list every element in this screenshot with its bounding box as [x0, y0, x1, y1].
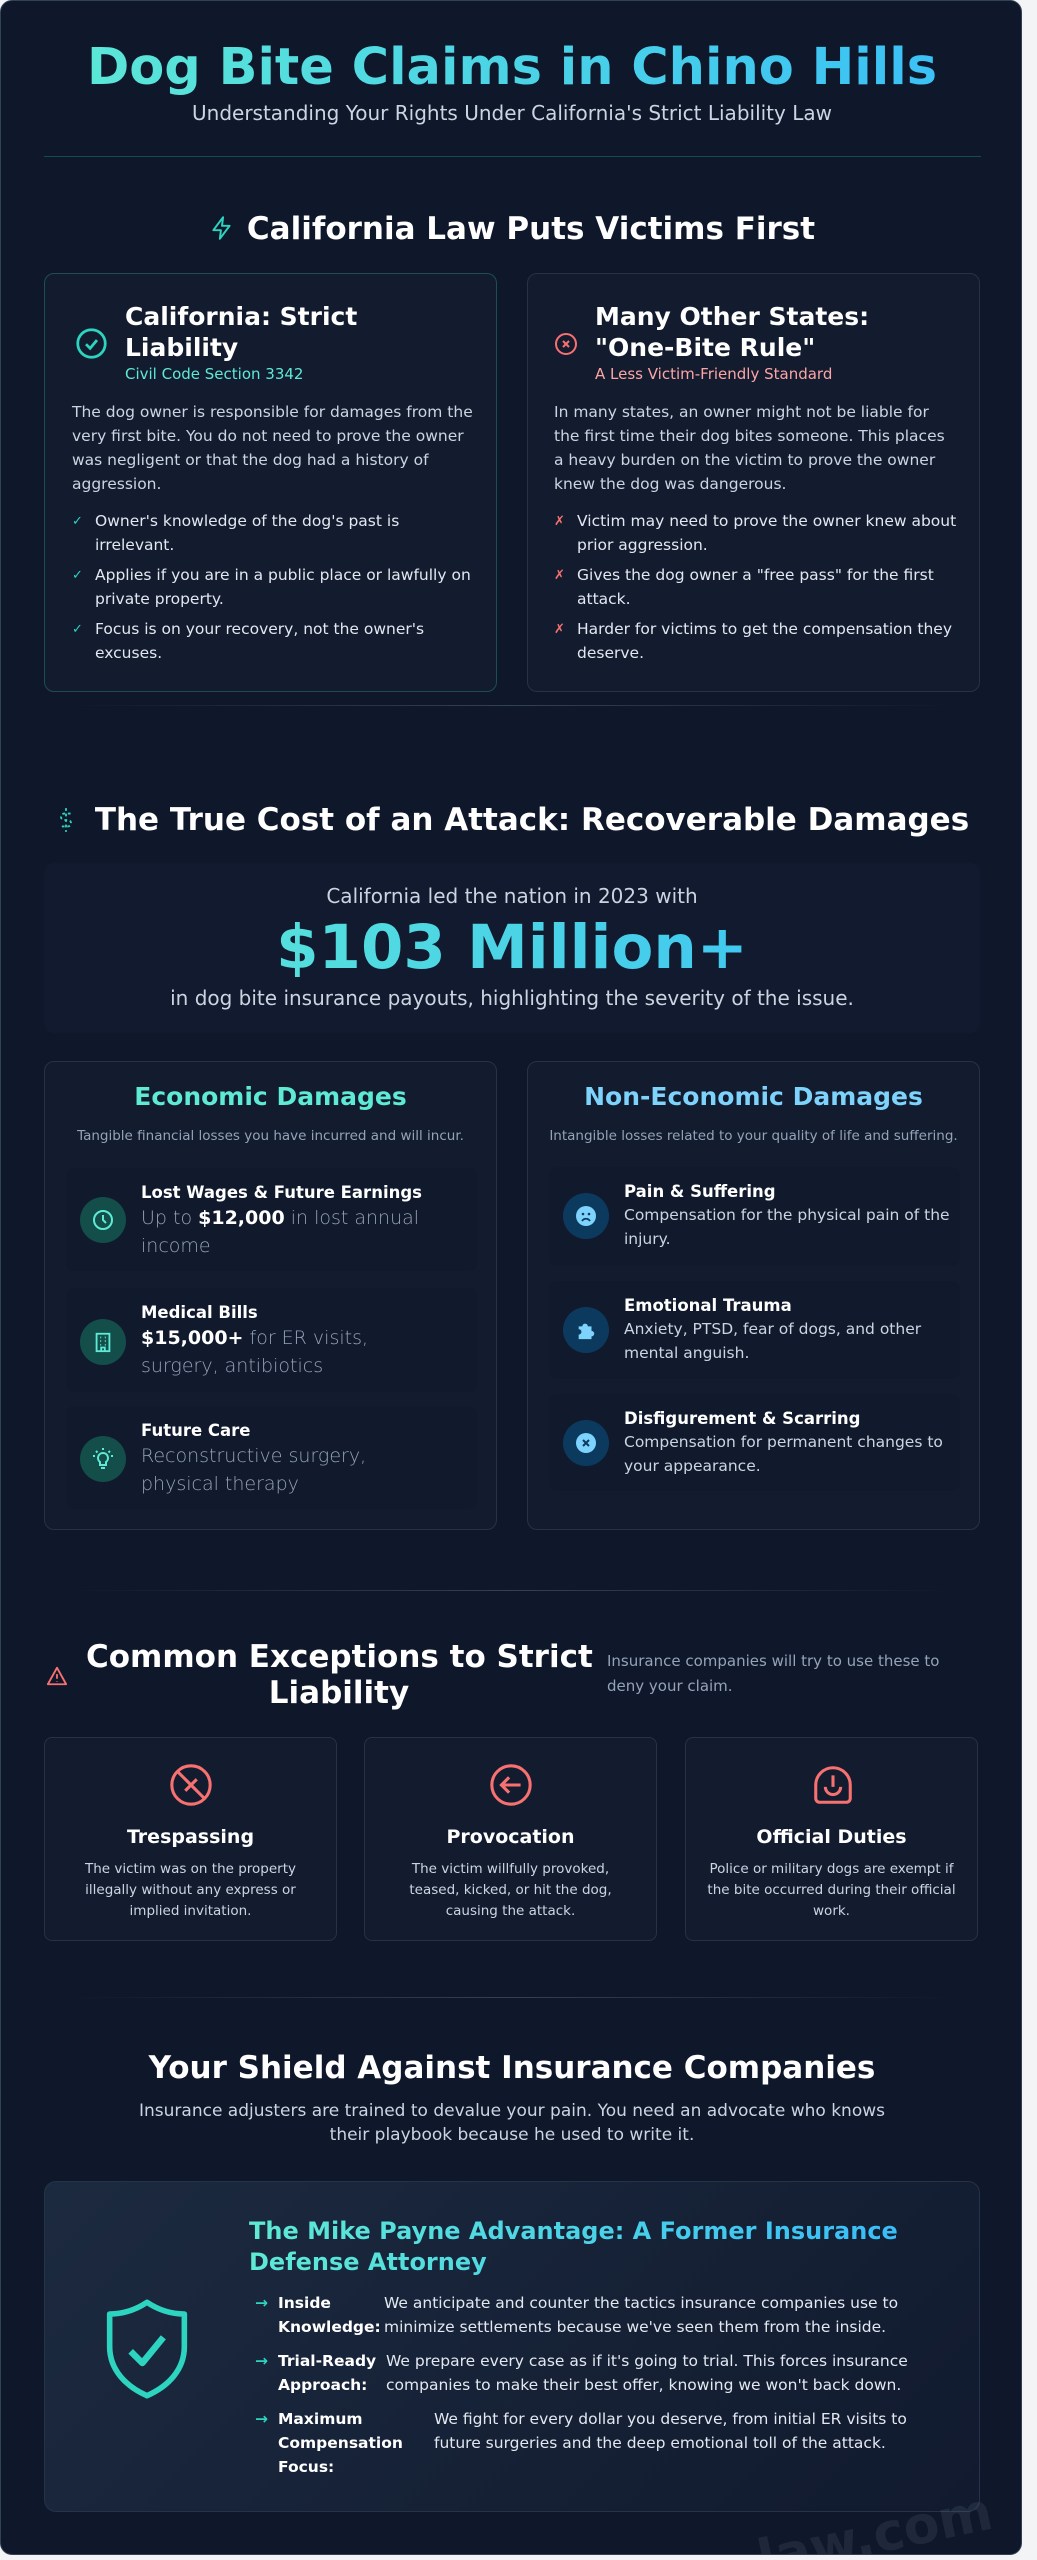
body text: a heavy burden on the victim to prove the owner	[554, 451, 935, 469]
x list: attack.	[577, 590, 631, 608]
panel subtitle: Tangible financial losses you have incurred and will incur.	[77, 1128, 464, 1144]
bullet: trial-ready: companies to make their best offer, knowing we won't back down.	[386, 2376, 901, 2394]
checklist: excuses.	[95, 644, 162, 662]
bullet: trial-ready: →	[255, 2352, 268, 2370]
bullet: inside knowledge: minimize settlements because we've seen them from the inside.	[384, 2318, 886, 2336]
body text: knew the dog was dangerous.	[554, 475, 786, 493]
body text: The dog owner is responsible for damages from the	[72, 403, 473, 421]
bullet: maximum compensation: Focus:	[278, 2458, 334, 2476]
x list	[554, 512, 956, 662]
item: disfigurement	[549, 1394, 960, 1491]
item: lost wages: Up to $12,000 in lost annual	[141, 1207, 419, 1229]
card: official duties	[685, 1737, 978, 1941]
x list: deserve.	[577, 644, 644, 662]
bullet: inside knowledge: Inside	[278, 2294, 331, 2312]
card: provocation: Provocation	[446, 1826, 575, 1848]
x list: ✗	[554, 622, 565, 637]
panel title: Economic Damages	[134, 1082, 407, 1111]
item: emotional trauma: Anxiety, PTSD, fear of dogs, and other	[624, 1320, 921, 1338]
x list: Gives the dog owner a "free pass" for the first	[577, 566, 934, 584]
body text	[554, 403, 945, 493]
item: future care	[66, 1406, 477, 1509]
panel title: Non-Economic Damages	[584, 1082, 923, 1111]
body text: aggression.	[72, 475, 161, 493]
card: trespassing: implied invitation.	[130, 1903, 251, 1919]
item: future care: Future Care	[141, 1421, 250, 1440]
stat callout	[44, 863, 980, 1033]
card title: "One-Bite Rule"	[595, 333, 815, 362]
panel: California strict liability	[44, 273, 497, 692]
title: Dog Bite Claims in Chino Hills	[87, 38, 937, 97]
card title	[125, 302, 357, 362]
icon: lightning	[212, 216, 231, 240]
subtitle: Understanding Your Rights Under California's Strict Liability Law	[192, 101, 832, 125]
item: future care: Reconstructive surgery,	[141, 1445, 366, 1467]
x list: prior aggression.	[577, 536, 708, 554]
card: provocation	[364, 1737, 657, 1941]
card title: Liability	[125, 333, 238, 362]
bullet: inside knowledge: Knowledge:	[278, 2318, 381, 2336]
bullet: maximum compensation: future surgeries and the deep emotional toll of the attack.	[434, 2434, 886, 2452]
checklist: Owner's knowledge of the dog's past is	[95, 512, 399, 530]
checklist	[72, 512, 471, 662]
icon: warning	[46, 1666, 68, 1686]
panel subtitle: Intangible losses related to your quality of life and suffering.	[549, 1128, 958, 1144]
item: disfigurement: your appearance.	[624, 1457, 761, 1475]
body text: was negligent or that the dog had a history of	[72, 451, 429, 469]
body text	[72, 403, 473, 493]
checklist: irrelevant.	[95, 536, 174, 554]
x list: Victim may need to prove the owner knew about	[577, 512, 956, 530]
card title: Many Other States:	[595, 302, 869, 331]
item: medical bills	[66, 1288, 477, 1392]
card: official duties: the bite occurred during their official	[707, 1882, 956, 1898]
card title: California: Strict	[125, 302, 357, 331]
checklist: Focus is on your recovery, not the owner's	[95, 620, 424, 638]
item: future care: physical therapy	[141, 1473, 299, 1495]
item: medical bills: $15,000+ for ER visits,	[141, 1327, 368, 1349]
panel: non-economic damages	[527, 1061, 980, 1530]
heading: common exceptions	[46, 1639, 939, 1711]
checklist: ✓	[72, 622, 83, 637]
checklist: ✓	[72, 514, 83, 529]
heading: recoverable damages: The True Cost of an Attack: Recoverable Damages	[95, 802, 969, 838]
item: medical bills: Medical Bills	[141, 1303, 258, 1322]
icon: x circle	[555, 333, 577, 355]
item: emotional trauma	[549, 1281, 960, 1379]
box heading: Defense Attorney	[249, 2248, 487, 2276]
bullet: trial-ready: Trial-Ready	[278, 2352, 376, 2370]
box heading	[249, 2216, 898, 2278]
checklist: Applies if you are in a public place or lawfully on	[95, 566, 471, 584]
text: shield intro: their playbook because he used to write it.	[330, 2125, 694, 2145]
card: official duties: work.	[813, 1903, 850, 1919]
checklist: ✓	[72, 568, 83, 583]
item: pain: Compensation for the physical pain of the	[624, 1206, 950, 1224]
item: pain	[549, 1167, 960, 1266]
panel: one-bite rule	[527, 273, 980, 692]
card: trespassing: Trespassing	[127, 1826, 254, 1848]
panel: economic damages	[44, 1061, 497, 1530]
card: provocation: teased, kicked, or hit the dog,	[409, 1882, 612, 1898]
card: official duties: Official Duties	[756, 1826, 907, 1848]
item: lost wages: Lost Wages & Future Earnings	[141, 1183, 422, 1202]
text: shield intro: Insurance adjusters are trained to devalue your pain. You need an advocate who knows	[139, 2101, 885, 2121]
bullet: maximum compensation	[255, 2410, 907, 2476]
icon: shield check	[106, 2300, 188, 2398]
item: disfigurement: Compensation for permanent changes to	[624, 1433, 943, 1451]
card subtitle: Civil Code Section 3342	[125, 365, 303, 383]
bullet: maximum compensation: We fight for every dollar you deserve, from initial ER visits to	[434, 2410, 907, 2428]
item: lost wages: income	[141, 1235, 211, 1257]
bullet: inside knowledge: →	[255, 2294, 268, 2312]
bullet: maximum compensation: Compensation	[278, 2434, 403, 2452]
card: official duties: Police or military dogs are exempt if	[710, 1861, 953, 1877]
card title	[595, 302, 869, 362]
bullet: maximum compensation: Maximum	[278, 2410, 363, 2428]
card: provocation: causing the attack.	[446, 1903, 575, 1919]
heading: common exceptions: deny your claim.	[607, 1677, 733, 1695]
card: trespassing: illegally without any express or	[85, 1882, 296, 1898]
icon: dollar	[60, 808, 72, 832]
item: medical bills: surgery, antibiotics	[141, 1355, 323, 1377]
bullet: trial-ready	[255, 2352, 908, 2394]
item: emotional trauma: mental anguish.	[624, 1344, 749, 1362]
bullet: inside knowledge: We anticipate and counter the tactics insurance companies use to	[384, 2294, 898, 2312]
card: trespassing	[44, 1737, 337, 1941]
checklist: private property.	[95, 590, 224, 608]
item: emotional trauma: Emotional Trauma	[624, 1296, 792, 1315]
bullet: inside knowledge	[255, 2294, 898, 2336]
stat callout: California led the nation in 2023 with	[326, 884, 698, 908]
box heading: The Mike Payne Advantage: A Former Insurance	[249, 2217, 898, 2245]
item: lost wages	[66, 1168, 477, 1271]
text: shield intro	[139, 2101, 885, 2145]
x list: ✗	[554, 568, 565, 583]
stat callout: in dog bite insurance payouts, highlighting the severity of the issue.	[170, 986, 854, 1010]
heading: California Law Puts Victims First: California Law Puts Victims First	[247, 211, 815, 247]
bullet: trial-ready: We prepare every case as if it's going to trial. This forces insurance	[386, 2352, 908, 2370]
heading: common exceptions: Common Exceptions to Strict	[86, 1639, 593, 1675]
x list: ✗	[554, 514, 565, 529]
item: disfigurement: Disfigurement & Scarring	[624, 1409, 860, 1428]
card: trespassing: The victim was on the property	[85, 1861, 296, 1877]
item: pain: Pain & Suffering	[624, 1182, 776, 1201]
bullet: trial-ready: Approach:	[278, 2376, 367, 2394]
card: provocation: The victim willfully provoked,	[412, 1861, 609, 1877]
bullet: maximum compensation: →	[255, 2410, 268, 2428]
heading: common exceptions: Liability	[269, 1675, 409, 1711]
stat callout: $103 Million+	[276, 912, 748, 983]
body text: very first bite. You do not need to prove the owner	[72, 427, 464, 445]
panel: Mike Payne advantage	[44, 2181, 980, 2512]
body text: In many states, an owner might not be liable for	[554, 403, 929, 421]
heading: common exceptions: Insurance companies will try to use these to	[607, 1652, 939, 1670]
heading: your shield: Your Shield Against Insurance Companies	[149, 2050, 875, 2086]
icon: check circle	[76, 328, 107, 359]
x list: Harder for victims to get the compensation they	[577, 620, 952, 638]
card subtitle: A Less Victim-Friendly Standard	[595, 365, 832, 383]
item: pain: injury.	[624, 1230, 671, 1248]
body text: the first time their dog bites someone. This places	[554, 427, 945, 445]
